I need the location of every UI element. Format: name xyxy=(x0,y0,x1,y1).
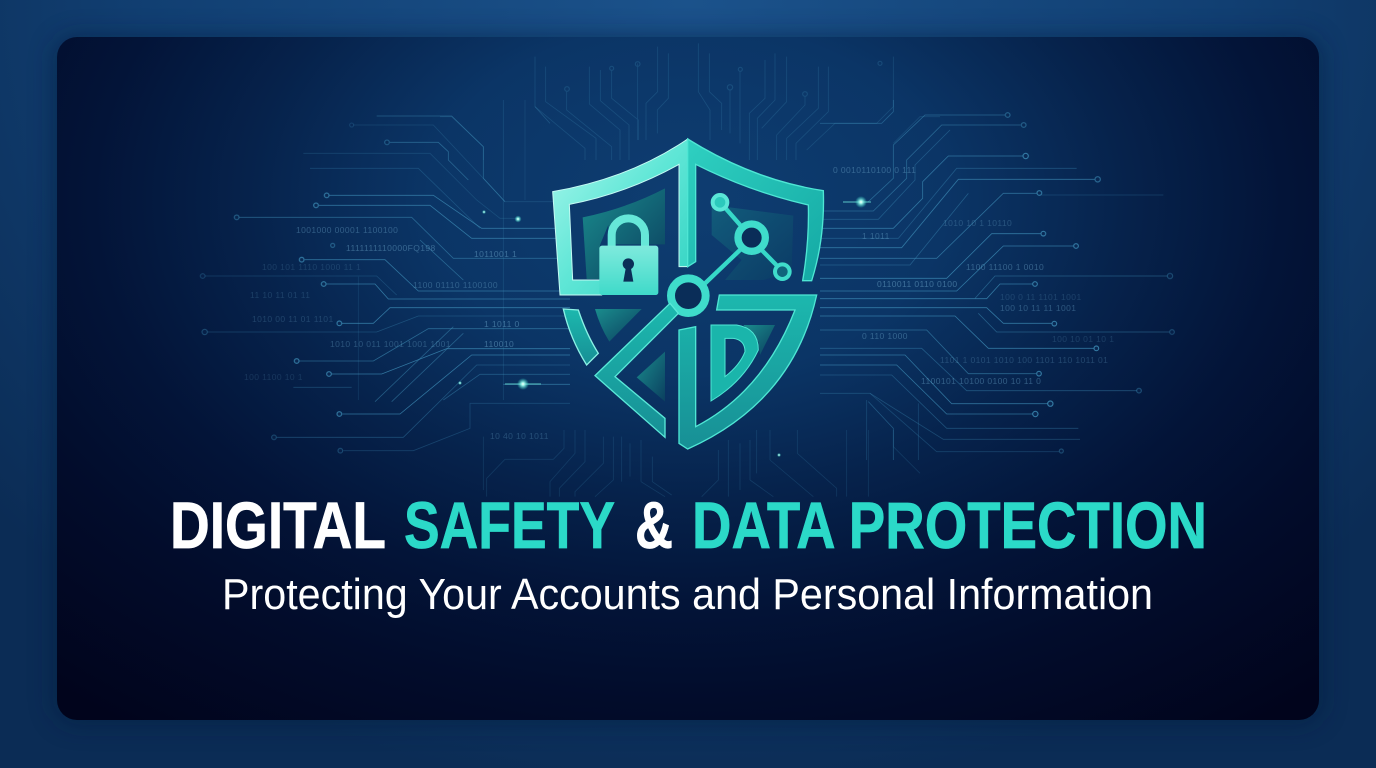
binary text: left side: 1100 01110 1100100 xyxy=(413,280,498,290)
binary text: right side: 100 0 11 1101 1001 xyxy=(1000,292,1082,302)
light sparks xyxy=(458,196,871,457)
binary text: left side: 1 1011 0 xyxy=(484,319,520,329)
binary text: right side: 1100 11100 1 0010 xyxy=(966,262,1044,272)
circuit board: right side xyxy=(820,100,1174,460)
subtitle: Protecting Your Accounts and Personal Information xyxy=(222,570,1153,619)
circuit board: top traces xyxy=(440,43,940,160)
binary text: right side: 100 10 01 10 1 xyxy=(1052,334,1114,344)
letter D mark xyxy=(711,325,758,401)
network nodes xyxy=(671,195,790,313)
binary text: left side: 110010 xyxy=(484,339,514,349)
binary text: right side: 1101 1 0101 1010 100 1101 110 1011 01 xyxy=(940,355,1108,365)
title: DATA PROTECTION xyxy=(692,488,1207,562)
binary text: left side xyxy=(244,225,549,441)
lower-left chevron xyxy=(595,303,678,437)
lower-right band xyxy=(679,295,817,449)
shield top-left band xyxy=(553,139,688,295)
shield emblem xyxy=(553,139,824,449)
binary text: left side: 1010 00 11 01 1101 xyxy=(252,314,334,324)
binary text: left side: 1111111110000FQ198 xyxy=(346,243,436,253)
binary text: right side: 0 0010110100 0 111 xyxy=(833,165,916,175)
shield top-right band xyxy=(688,139,824,281)
title: & xyxy=(635,488,673,562)
title xyxy=(170,488,1207,562)
binary text: left side: 1011001 1 xyxy=(474,249,517,259)
binary text: left side: 10 40 10 1011 xyxy=(490,431,549,441)
circuit board: bottom traces xyxy=(483,430,920,497)
title: DIGITAL xyxy=(170,488,386,562)
binary text: right side: 0 110 1000 xyxy=(862,331,908,341)
dark teal inner facets xyxy=(583,188,793,402)
binary text: left side: 100 101 1110 1000 11 1 xyxy=(262,262,361,272)
binary text: right side: 1 1011 xyxy=(862,231,890,241)
binary text: left side: 11 10 11 01 11 xyxy=(250,290,310,300)
binary text: left side: 100 1100 10 1 xyxy=(244,372,303,382)
title: SAFETY xyxy=(404,488,615,562)
lower-left arc segment xyxy=(563,309,598,365)
binary text: right side: 1010 10 1 10110 xyxy=(943,218,1012,228)
circuit board: left side xyxy=(200,100,570,453)
binary text: right side: 0110011 0110 0100 xyxy=(877,279,958,289)
binary text: left side: 1010 10 011 1001 1001 1001 xyxy=(330,339,451,349)
padlock xyxy=(599,218,658,295)
binary text: right side xyxy=(833,165,1114,386)
binary text: right side: 100 10 11 11 1001 xyxy=(1000,303,1076,313)
binary text: right side: 1100101 10100 0100 10 11 0 xyxy=(921,376,1041,386)
binary text: left side: 1001000 00001 1100100 xyxy=(296,225,398,235)
